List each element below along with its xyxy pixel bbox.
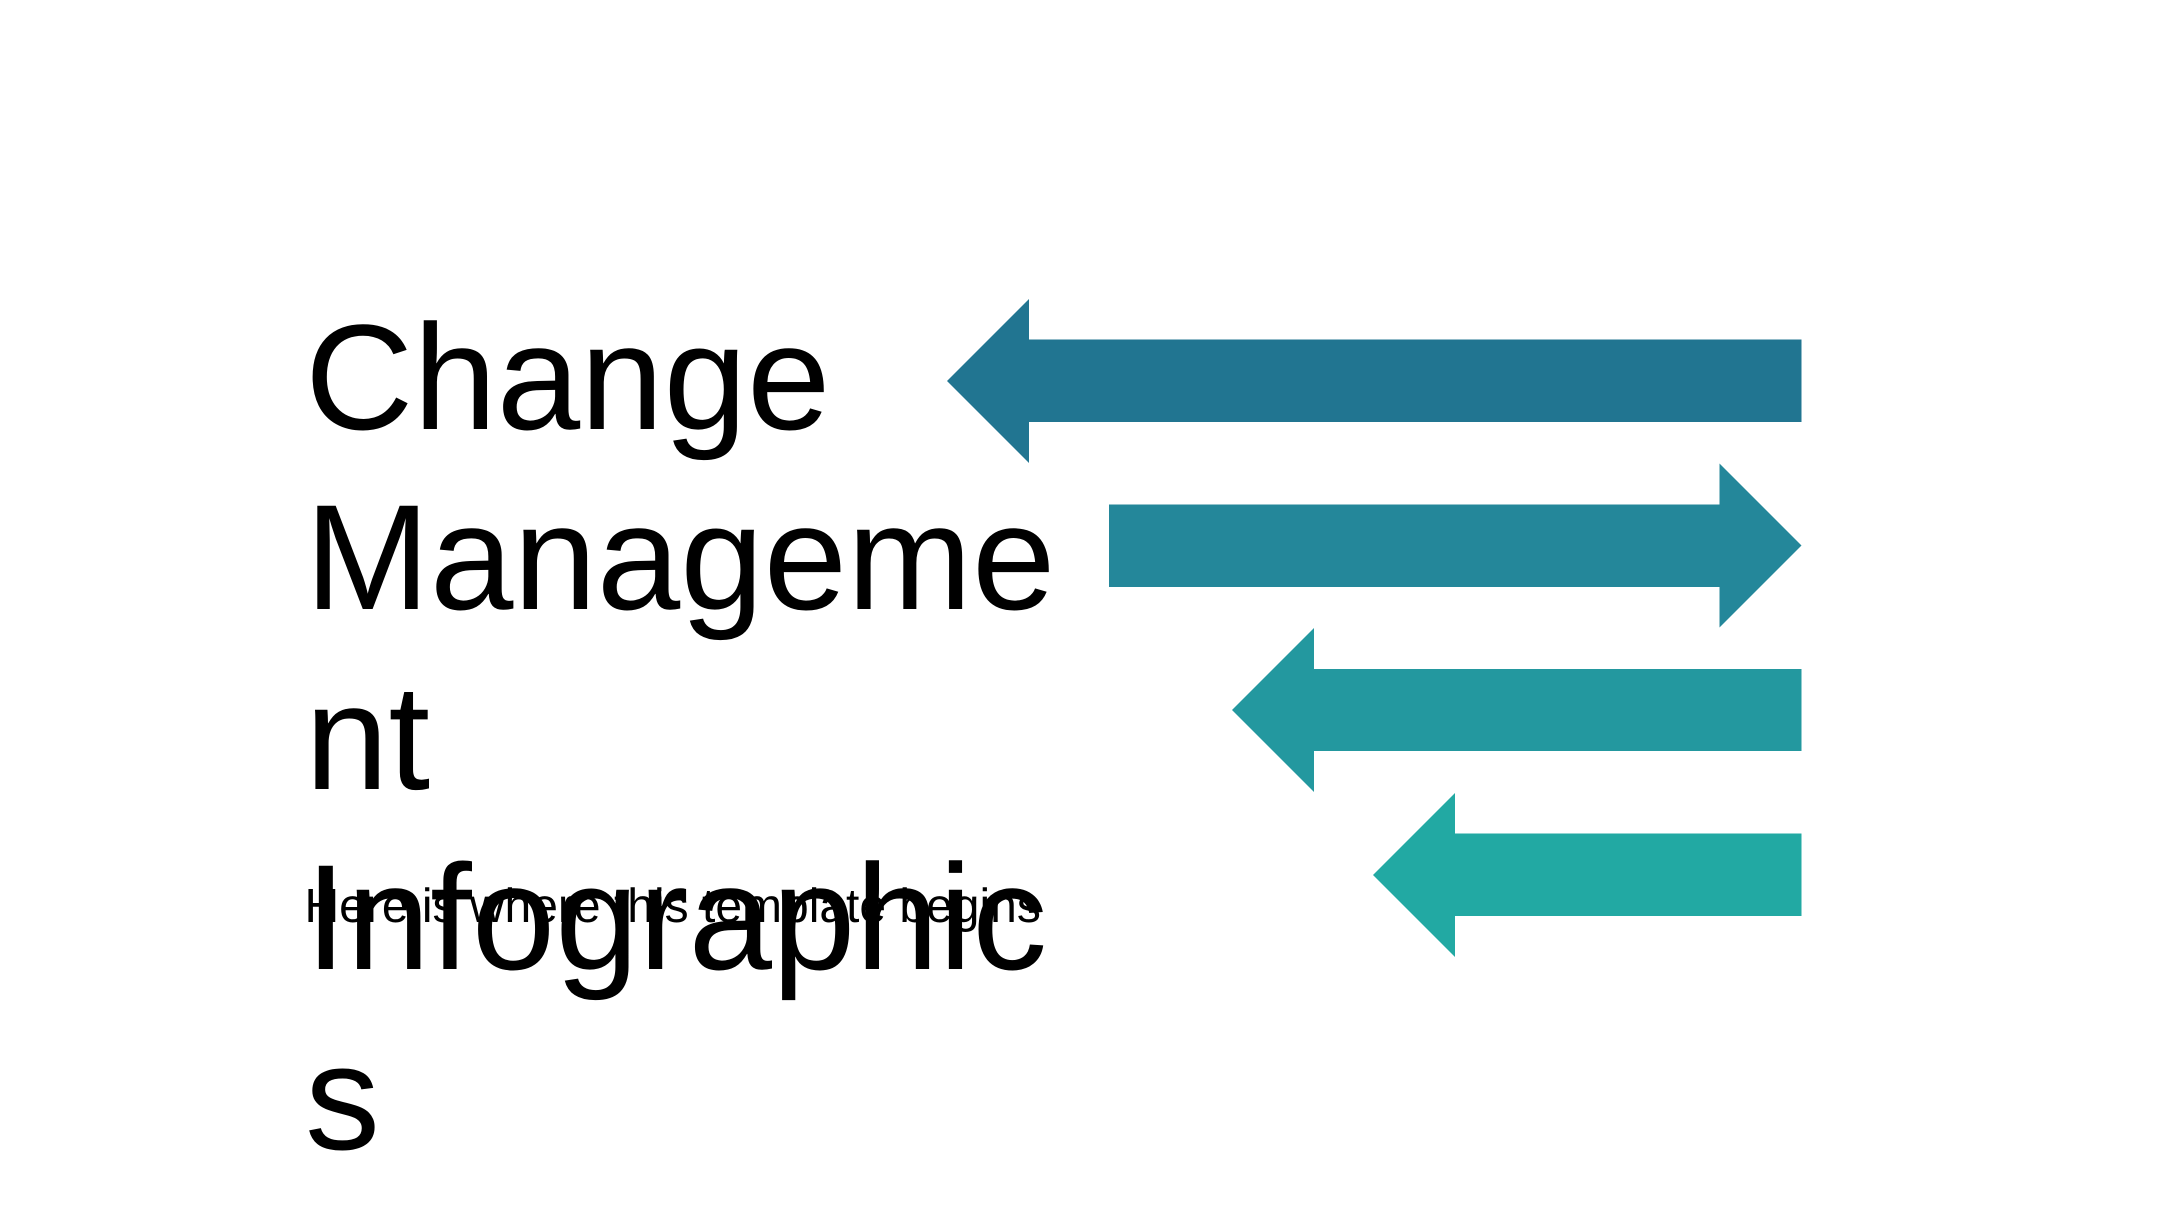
title: s — [305, 1013, 380, 1181]
title: nt — [305, 653, 430, 821]
title: Change — [305, 293, 830, 461]
arrow 2: pointing right — [1109, 464, 1802, 628]
title: Manageme — [305, 473, 1055, 641]
subtitle text: Here is where this template begins — [304, 880, 1041, 933]
title — [305, 293, 1055, 1181]
arrow 4: pointing left — [1373, 793, 1802, 957]
arrow 3: pointing left — [1232, 628, 1802, 792]
arrows group — [947, 299, 1802, 957]
arrow 1: pointing left — [947, 299, 1802, 463]
title: Infographic — [305, 833, 1047, 1001]
